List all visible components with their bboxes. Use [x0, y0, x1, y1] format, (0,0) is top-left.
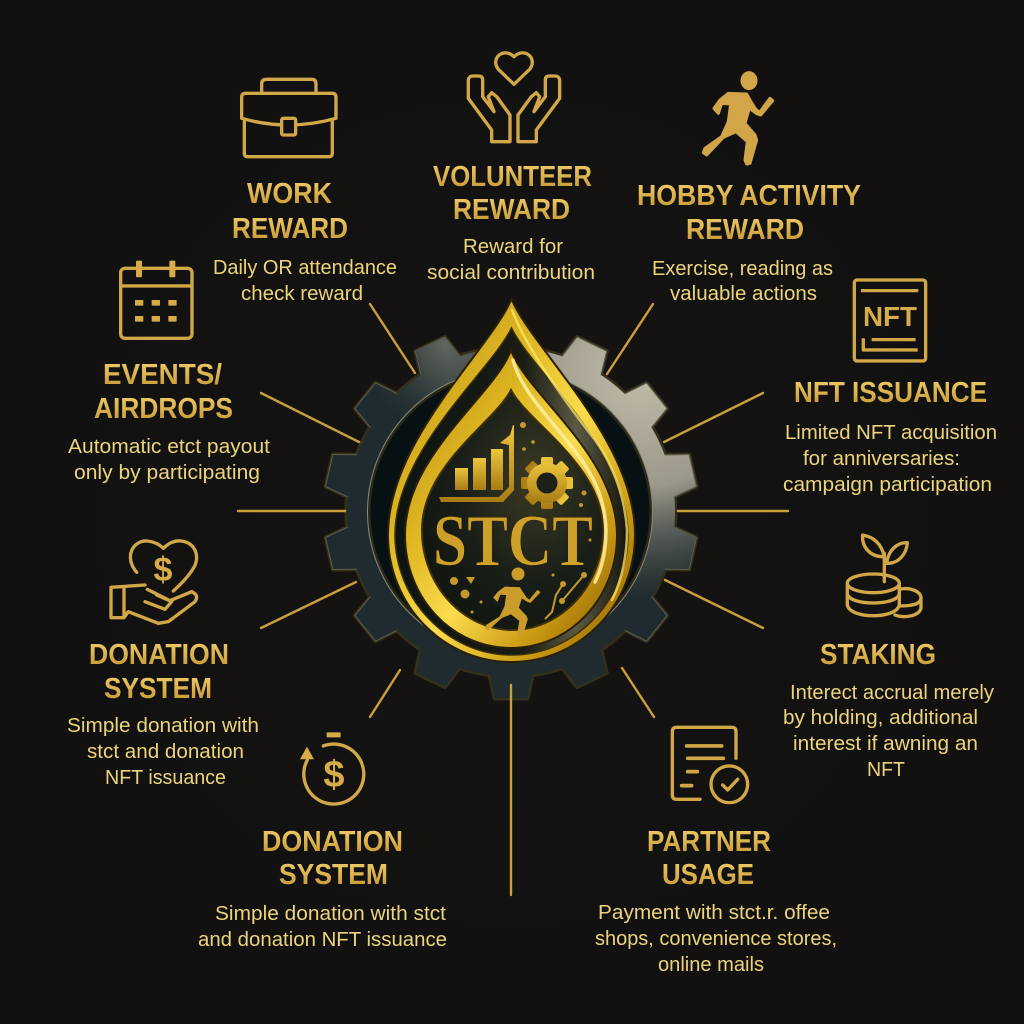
description: NFT issuance: [105, 767, 226, 789]
heading: [433, 161, 592, 226]
heading: DONATION: [89, 639, 229, 671]
description: Simple donation with stct: [215, 903, 446, 925]
description: for anniversaries:: [803, 448, 960, 470]
description: Simple donation with: [67, 715, 259, 737]
panel: events and airdrops: [68, 261, 270, 484]
heading: REWARD: [686, 214, 804, 246]
icon: NFT card: [854, 280, 926, 361]
icon: bar chart in drop: [439, 425, 514, 502]
description: social contribution: [427, 262, 595, 284]
description: stct and donation: [87, 741, 244, 763]
heading: USAGE: [662, 859, 754, 891]
heading: PARTNER: [647, 826, 771, 858]
description: Payment with stct.r. offee: [598, 902, 830, 924]
heading: NFT ISSUANCE: [794, 377, 987, 409]
central emblem: gear and gold drop: [324, 297, 698, 700]
panel: work reward: [213, 79, 397, 305]
heading: [232, 178, 348, 245]
description: [595, 902, 837, 976]
icon: runner in drop: [486, 568, 540, 636]
gold drop: [388, 299, 635, 662]
icon: NFT card: NFT: [863, 301, 917, 332]
heading: SYSTEM: [279, 859, 388, 891]
heading: REWARD: [453, 194, 570, 226]
icon: gear in drop: [521, 457, 573, 509]
panel: partner usage: [595, 727, 837, 976]
panel: volunteer reward: [427, 53, 595, 284]
icon: hand with heart and dollar: $: [154, 551, 173, 589]
icon: coins and sprout: [847, 535, 921, 617]
description: [427, 236, 595, 284]
icon: runner: [703, 73, 773, 164]
heading: [94, 359, 233, 425]
gear: [324, 335, 698, 700]
description: interest if awning an: [793, 733, 978, 755]
icon: calendar: [121, 261, 192, 338]
description: Automatic etct payout: [68, 436, 270, 458]
description: check reward: [241, 283, 363, 305]
description: [213, 257, 397, 305]
description: [68, 436, 270, 484]
decorative dots and chart line in drop: [450, 422, 592, 619]
panel: donation system left: [67, 541, 259, 789]
logo text: STCT: [433, 500, 593, 581]
description: Limited NFT acquisition: [785, 422, 997, 444]
heading: STAKING: [820, 639, 936, 671]
description: campaign participation: [783, 474, 992, 496]
icon: hand with heart and dollar: [111, 541, 197, 623]
description: [198, 903, 447, 951]
description: and donation NFT issuance: [198, 929, 447, 951]
heading: DONATION: [262, 826, 403, 858]
icon: dollar stopwatch: $: [323, 754, 345, 796]
description: online mails: [658, 954, 764, 976]
icon: heart and hands: [468, 53, 560, 142]
heading: WORK: [247, 178, 332, 210]
description: [783, 422, 997, 496]
description: [783, 682, 994, 781]
heading: [89, 639, 229, 705]
heading: [637, 180, 861, 246]
connector lines: [238, 304, 788, 895]
heading: EVENTS/: [103, 359, 222, 391]
panel: staking: [783, 535, 994, 781]
description: valuable actions: [670, 283, 817, 305]
description: [652, 258, 833, 305]
description: shops, convenience stores,: [595, 928, 837, 950]
heading: VOLUNTEER: [433, 161, 592, 193]
heading: REWARD: [232, 213, 348, 245]
heading: [262, 826, 403, 891]
panel: donation system bottom: [198, 732, 447, 951]
description: [67, 715, 259, 789]
icon: briefcase: [242, 79, 336, 157]
icon: dollar stopwatch: [300, 732, 364, 804]
panel: hobby activity reward: [637, 73, 861, 305]
panel: NFT issuance: [783, 280, 997, 496]
heading: SYSTEM: [104, 673, 212, 705]
description: Reward for: [463, 236, 563, 258]
heading: [647, 826, 771, 891]
icon: document with check: [672, 727, 748, 803]
description: Exercise, reading as: [652, 258, 833, 280]
heading: HOBBY ACTIVITY: [637, 180, 861, 212]
description: Interect accrual merely: [790, 682, 994, 704]
heading: AIRDROPS: [94, 393, 233, 425]
description: only by participating: [74, 462, 260, 484]
description: Daily OR attendance: [213, 257, 397, 279]
description: NFT: [867, 759, 905, 781]
description: by holding, additional: [783, 707, 978, 729]
